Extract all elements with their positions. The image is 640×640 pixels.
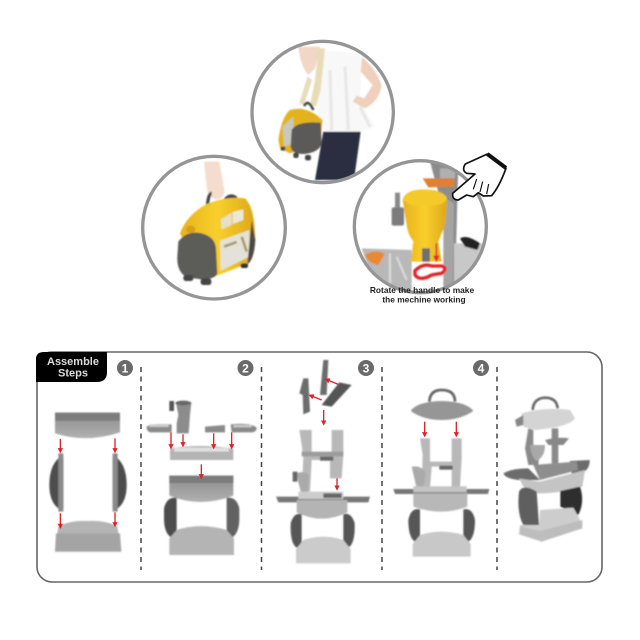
pants <box>315 132 361 180</box>
table wings <box>503 468 540 480</box>
orange part <box>423 178 454 187</box>
black knob <box>460 237 480 250</box>
right arm <box>353 57 382 108</box>
step 1 drawing <box>49 413 127 552</box>
left arm <box>298 47 320 75</box>
step number 2 <box>238 360 254 376</box>
step number 4 <box>473 360 489 376</box>
panel: assemble steps <box>36 352 602 582</box>
finished workbench drawing <box>503 398 590 542</box>
arrow <box>434 243 439 259</box>
heading badge: assemble steps: Assemble <box>47 356 99 368</box>
caption: rotate the handle: the mechine working <box>382 294 466 304</box>
red handle <box>415 265 445 278</box>
step number 3 <box>358 360 374 376</box>
step number 4: 4 <box>478 362 485 376</box>
side dark <box>247 220 255 264</box>
step number 1 <box>117 360 133 376</box>
table parts <box>362 248 412 293</box>
caption: rotate the handle <box>370 285 474 304</box>
heading badge: assemble steps <box>36 352 107 382</box>
yellow machine <box>403 189 447 262</box>
gray shell <box>177 233 217 279</box>
bag <box>278 109 323 153</box>
step number 2: 2 <box>242 362 249 376</box>
panel border <box>37 352 602 582</box>
ring <box>354 161 486 293</box>
strap <box>299 48 325 107</box>
step number 3: 3 <box>363 362 370 376</box>
step 4 drawing <box>393 390 489 557</box>
back column <box>430 162 458 290</box>
stickers <box>221 213 232 229</box>
caption: rotate the handle: Rotate the handle to make <box>370 285 474 295</box>
wheels <box>183 275 193 281</box>
panel: carrying on shoulder photo circle <box>252 41 393 183</box>
hand <box>204 162 224 199</box>
icon: pointing hand <box>453 154 506 200</box>
ring <box>143 156 285 299</box>
step 2 drawing <box>147 401 257 555</box>
shirt <box>317 114 361 133</box>
step number 1: 1 <box>122 362 129 376</box>
spout <box>422 248 430 262</box>
yellow case <box>180 198 255 278</box>
handle <box>207 193 237 207</box>
clasp <box>186 226 195 233</box>
ring <box>252 41 393 183</box>
panel: carrying by handle photo circle <box>143 156 285 299</box>
step 3 drawing <box>276 360 370 563</box>
heading badge: assemble steps: Steps <box>58 368 88 380</box>
crank <box>394 192 401 208</box>
panel: rotate handle machine photo circle <box>354 154 506 293</box>
